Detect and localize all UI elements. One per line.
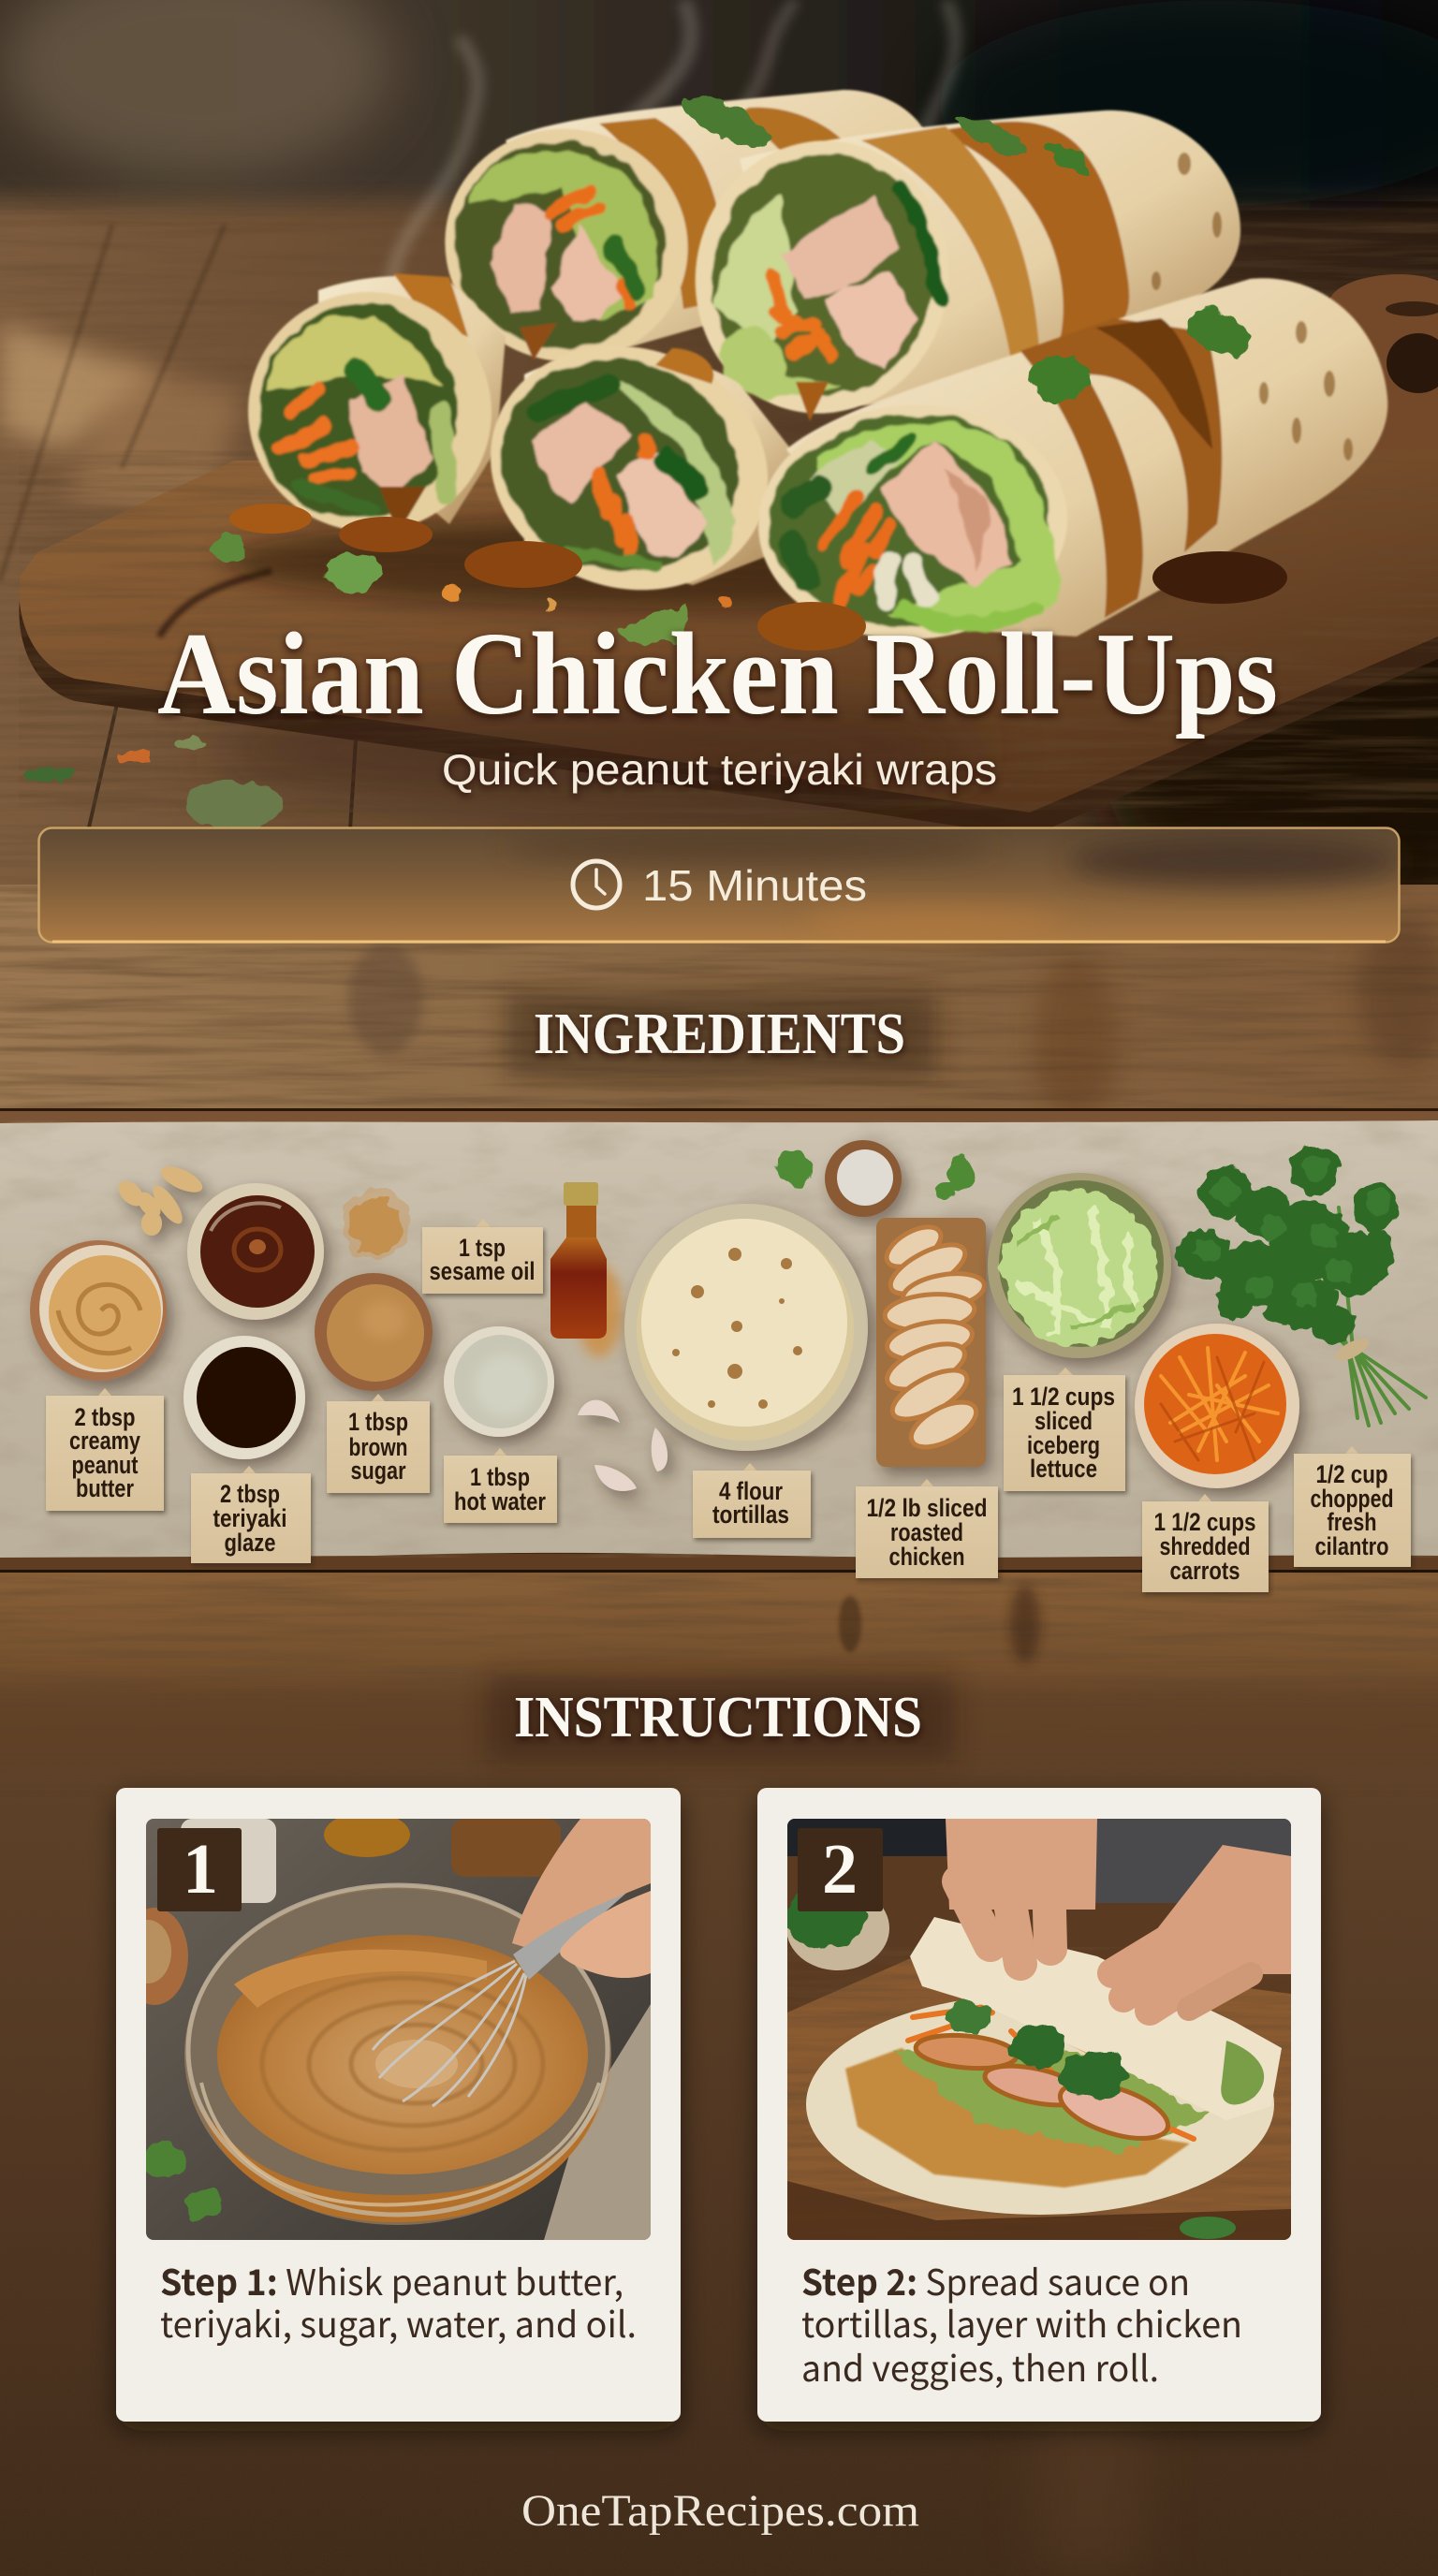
label: roasted chicken: 1/2 lb sliced	[867, 1494, 987, 1522]
ingredient: hot water bowl	[444, 1326, 554, 1437]
label: shredded carrots	[1142, 1494, 1269, 1592]
table background	[0, 0, 1438, 927]
label: peanut butter: 2 tbsp	[75, 1403, 135, 1431]
step 2 text: and veggies, then roll.	[801, 2340, 1159, 2392]
label: shredded carrots: carrots	[1170, 1557, 1240, 1585]
label: teriyaki glaze: teriyaki	[213, 1504, 286, 1532]
label: flour tortillas: 4 flour	[719, 1477, 783, 1505]
label: iceberg lettuce: lettuce	[1030, 1455, 1097, 1483]
filling	[257, 301, 459, 519]
label: iceberg lettuce	[1004, 1368, 1125, 1491]
label: iceberg lettuce: sliced	[1034, 1407, 1093, 1435]
label: fresh cilantro	[1294, 1446, 1411, 1567]
step 2 text: Step 2: Spread sauce on	[801, 2254, 1190, 2305]
ingredient: brown sugar bowl	[315, 1273, 433, 1391]
wrap: large front right	[753, 278, 1387, 647]
label: flour tortillas	[693, 1463, 811, 1538]
filling	[474, 329, 766, 602]
lower wood and brown background	[0, 1554, 1438, 2576]
icon: clock	[573, 861, 620, 908]
step 2 text: tortillas, layer with chicken	[801, 2296, 1242, 2348]
label: roasted chicken: roasted	[890, 1518, 963, 1546]
label: roasted chicken	[856, 1479, 998, 1578]
ingredient: teriyaki bowl	[187, 1183, 324, 1320]
ingredients heading: INGREDIENTS	[534, 1003, 905, 1066]
panel: step 1 card	[116, 1788, 681, 2422]
wrap: upper right	[674, 110, 1240, 433]
label: roasted chicken: chicken	[889, 1543, 964, 1571]
label: sesame oil	[422, 1219, 543, 1294]
label: flour tortillas: tortillas	[712, 1500, 789, 1529]
ingredient: garlic cloves	[578, 1400, 668, 1491]
cutting board handle	[1329, 274, 1438, 450]
panel: step 2 card	[757, 1788, 1321, 2422]
time bar	[38, 827, 1404, 943]
ingredient: soy glaze bowl	[183, 1336, 305, 1459]
title: Asian Chicken Roll-Ups	[157, 609, 1278, 739]
subtitle: Quick peanut teriyaki wraps	[442, 745, 997, 794]
ingredient: peanut butter bowl	[30, 1240, 167, 1381]
cutting board	[19, 449, 1438, 837]
step 1 photo: whisking sauce in glass bowl	[121, 1812, 651, 2240]
step 1 text: Step 1: Whisk peanut butter,	[160, 2254, 624, 2305]
ingredient: peanuts	[114, 1162, 206, 1236]
ingredient: sugar pile	[343, 1189, 410, 1260]
label: brown sugar: brown	[348, 1433, 408, 1461]
upper wood band	[0, 885, 1438, 1124]
herb garnish and crumbs	[22, 87, 1256, 829]
ingredient: sesame oil bottle	[550, 1182, 622, 1357]
step 2 photo: rolling tortilla by hand	[782, 1819, 1291, 2240]
wrap: left	[247, 272, 506, 530]
step 1 text	[160, 2254, 637, 2348]
prep time: 15 Minutes	[642, 861, 867, 910]
linen cloth	[0, 1120, 1438, 1558]
wrap: front middle	[459, 311, 800, 625]
label: teriyaki glaze: glaze	[225, 1529, 275, 1557]
label: sesame oil: 1 tsp	[459, 1234, 506, 1262]
label: fresh cilantro: cilantro	[1314, 1532, 1389, 1560]
label: teriyaki glaze: 2 tbsp	[220, 1480, 280, 1508]
filling	[694, 136, 954, 415]
label: brown sugar: 1 tbsp	[348, 1408, 408, 1436]
ingredient: salt bowl	[825, 1140, 902, 1217]
ingredient: shredded carrots bowl	[1135, 1324, 1299, 1488]
label: hot water: 1 tbsp	[470, 1463, 530, 1491]
label: iceberg lettuce: iceberg	[1027, 1431, 1100, 1459]
wrap shadow	[225, 515, 1198, 608]
label: brown sugar	[327, 1394, 430, 1493]
label: shredded carrots: 1 1/2 cups	[1153, 1508, 1256, 1536]
label: peanut butter: butter	[76, 1474, 134, 1502]
label: peanut butter: peanut	[71, 1451, 139, 1479]
label: peanut butter: creamy	[69, 1427, 140, 1455]
wrap: back middle	[444, 88, 923, 361]
footer brand: OneTapRecipes.com	[521, 2486, 919, 2536]
sauce drips	[229, 504, 1287, 651]
hero photo: peanut teriyaki wraps on wooden board	[0, 0, 1438, 927]
label: teriyaki glaze	[191, 1466, 311, 1563]
label: shredded carrots: shredded	[1159, 1532, 1251, 1560]
filling	[764, 408, 1057, 633]
label: brown sugar: sugar	[350, 1456, 406, 1485]
filling	[453, 139, 668, 351]
step 2 number badge	[798, 1828, 883, 1911]
steam	[382, 0, 966, 277]
ingredient: iceberg lettuce bowl	[988, 1173, 1171, 1358]
step 1 number badge	[157, 1828, 242, 1911]
step 1 text: teriyaki, sugar, water, and oil.	[160, 2296, 637, 2348]
icon: herb leaves	[771, 1143, 976, 1197]
label: sesame oil: sesame oil	[429, 1257, 536, 1285]
label: fresh cilantro: fresh	[1328, 1508, 1376, 1536]
label: fresh cilantro: chopped	[1311, 1485, 1393, 1513]
step 2 number badge: 2	[822, 1830, 858, 1909]
step 2 text	[801, 2254, 1242, 2392]
label: iceberg lettuce: 1 1/2 cups	[1012, 1383, 1115, 1411]
label: fresh cilantro: 1/2 cup	[1316, 1460, 1387, 1488]
ingredient: flour tortillas plate	[624, 1204, 868, 1451]
ingredient: cilantro bunch	[1177, 1144, 1426, 1426]
label: hot water: hot water	[454, 1487, 546, 1515]
ingredient: roasted chicken on board	[876, 1218, 987, 1467]
label: hot water	[444, 1448, 557, 1523]
step 1 number badge: 1	[183, 1830, 218, 1909]
instructions heading: INSTRUCTIONS	[514, 1686, 922, 1749]
label: peanut butter	[46, 1388, 164, 1511]
